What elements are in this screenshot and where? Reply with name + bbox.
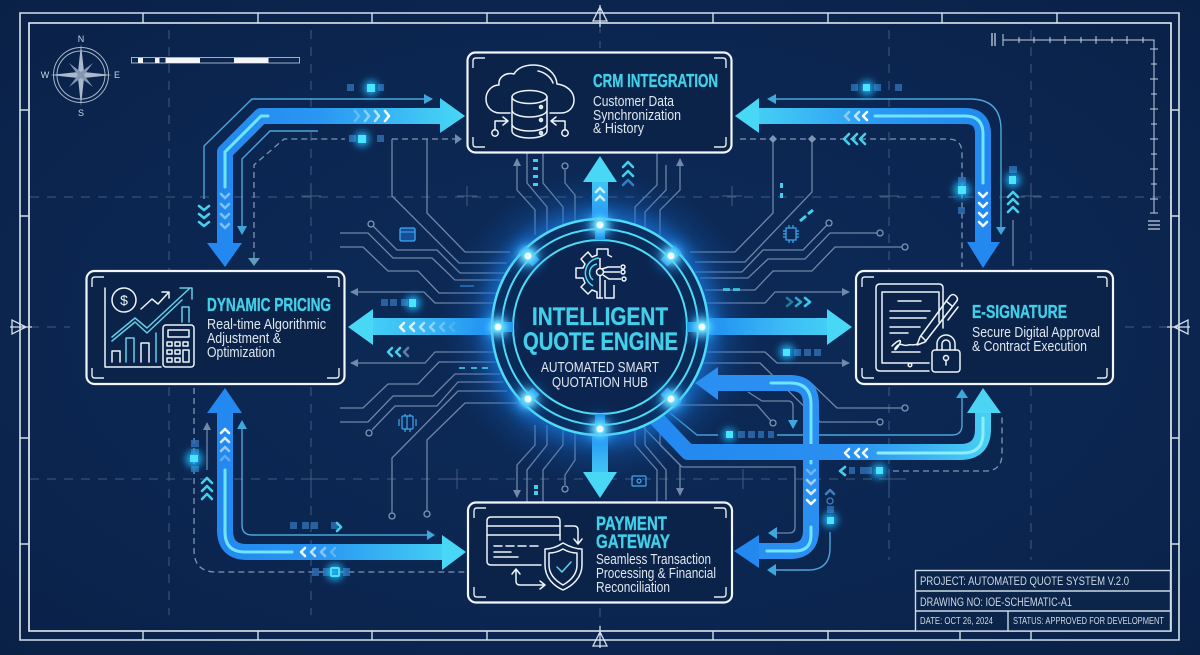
- heading: DYNAMIC PRICING: [207, 295, 331, 315]
- hub connector bars: [492, 219, 708, 435]
- spoke arrow: up: [583, 156, 617, 228]
- description: [972, 325, 1100, 355]
- spoke arrow: left: [348, 309, 500, 345]
- icon: pricing chart and calculator: [105, 288, 194, 367]
- small icon: android chip: [399, 414, 416, 432]
- hub title line 2: QUOTE ENGINE: [523, 328, 678, 356]
- small icon: payment device: [632, 476, 646, 486]
- panel: payment gateway: [468, 502, 732, 602]
- description: Reconciliation: [596, 580, 670, 596]
- description: Real-time Algorithmic: [207, 317, 326, 333]
- compass rose: E: [114, 70, 120, 80]
- compass rose: N: [78, 34, 84, 44]
- hub wide halos: [486, 213, 714, 441]
- thin traces around bottom left arrow: [194, 388, 465, 572]
- heading: CRM INTEGRATION: [593, 71, 718, 91]
- scale bar: [132, 58, 300, 63]
- title block: PROJECT: AUTOMATED QUOTE SYSTEM V.2.0: [920, 574, 1129, 588]
- compass rose: [41, 34, 120, 118]
- arrow: hub to e-signature: [650, 388, 1002, 475]
- circuit traces top and bottom: [517, 153, 680, 503]
- description: Processing & Financial: [596, 566, 716, 582]
- heading: E-SIGNATURE: [972, 302, 1067, 322]
- heading: PAYMENT: [596, 514, 667, 535]
- title block: [915, 570, 1170, 631]
- hub title: INTELLIGENT: [532, 303, 668, 331]
- description: Secure Digital Approval: [972, 325, 1100, 341]
- title block: DRAWING NO: IOE-SCHEMATIC-A1: [920, 595, 1072, 609]
- circuit traces right: [643, 139, 968, 576]
- description: & History: [593, 121, 645, 137]
- icon: pricing chart and calculator: $: [120, 292, 128, 308]
- ruler: [992, 33, 1160, 229]
- arrow: hub to payment gateway: [695, 367, 815, 568]
- hub glow: [435, 162, 765, 492]
- title block: DATE: OCT 26, 2024: [920, 616, 993, 627]
- panel: CRM integration: [468, 52, 732, 152]
- circuit traces left: [340, 139, 517, 519]
- heading: GATEWAY: [596, 532, 670, 553]
- thin traces around top right arrow: [740, 94, 1018, 267]
- arrow: top left flow to CRM: [207, 98, 465, 267]
- chevrons above right spoke: [787, 298, 810, 306]
- heading: [596, 514, 670, 553]
- data blocks: [186, 81, 1020, 580]
- hub glowing nodes: [490, 217, 710, 437]
- spoke arrow: right: [700, 309, 852, 345]
- panel: e-signature: [856, 271, 1113, 384]
- hub subtitle line 2: QUOTATION HUB: [552, 374, 648, 391]
- description: Optimization: [207, 345, 275, 361]
- compass rose: S: [78, 108, 84, 118]
- thin traces around top left arrow: [199, 99, 462, 266]
- description: [596, 552, 716, 596]
- icon: cloud database: [486, 65, 574, 138]
- hub subtitle: AUTOMATED SMART: [541, 359, 659, 376]
- description: Synchronization: [593, 108, 681, 124]
- arrow: bottom left flow to payment: [207, 388, 466, 570]
- description: Customer Data: [593, 94, 675, 110]
- hub: [486, 213, 714, 441]
- small icon: window: [400, 228, 415, 241]
- compass rose: W: [41, 70, 50, 80]
- small icon: chip: [783, 225, 799, 243]
- description: Seamless Transaction: [596, 552, 711, 568]
- description: [207, 317, 326, 361]
- icon: tablet, pen, lock: [876, 284, 960, 372]
- panel: dynamic pricing: [86, 271, 344, 384]
- arrow: top right flow to CRM: [735, 98, 1000, 268]
- description: Adjustment &: [207, 331, 281, 347]
- description: & Contract Execution: [972, 339, 1087, 355]
- spoke arrow: down: [583, 426, 617, 498]
- icon: card and shield: [487, 517, 582, 590]
- description: [593, 94, 681, 137]
- icon: gear circuit: [576, 249, 626, 298]
